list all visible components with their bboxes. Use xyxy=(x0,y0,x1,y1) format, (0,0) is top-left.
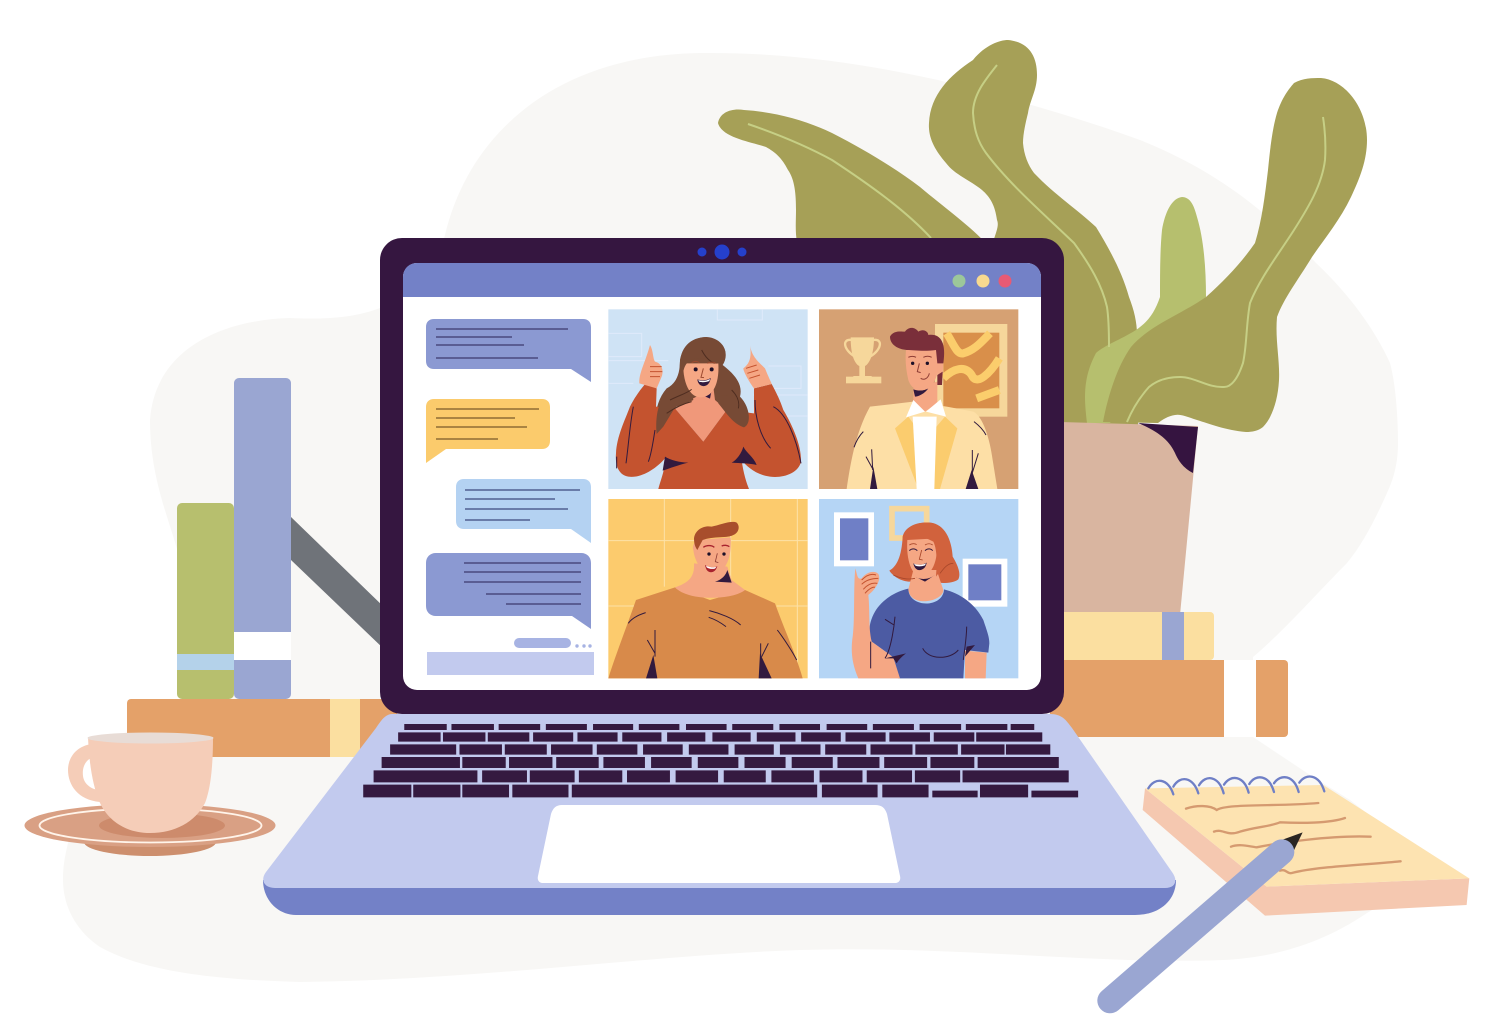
left hand xyxy=(639,345,663,388)
face xyxy=(683,363,718,397)
hair bangs xyxy=(680,337,726,372)
webcam xyxy=(698,244,746,260)
spiral binding xyxy=(1148,776,1324,794)
framed picture xyxy=(935,324,1007,417)
chat bubble 3 xyxy=(456,479,591,543)
sweater shadows xyxy=(663,447,757,471)
coffee cup and saucer xyxy=(24,732,276,856)
trackpad xyxy=(538,805,900,883)
saucer shadow xyxy=(99,813,225,838)
shirt xyxy=(869,589,989,678)
face xyxy=(907,538,937,577)
lapels xyxy=(895,417,957,489)
books: left stack xyxy=(127,378,397,757)
hair xyxy=(890,328,944,363)
book: leaning grey xyxy=(291,517,385,650)
face features xyxy=(911,362,914,365)
neck shadow xyxy=(699,390,712,399)
chat panel xyxy=(426,319,594,675)
window title bar xyxy=(403,263,1041,297)
right sleeve arm xyxy=(965,651,987,678)
screen xyxy=(403,263,1041,690)
handwriting lines xyxy=(1186,803,1401,873)
collar xyxy=(906,399,946,417)
book: blue xyxy=(234,378,291,699)
leaf veins xyxy=(748,65,1325,422)
typing pill xyxy=(514,638,571,648)
chat bubble 1 xyxy=(426,319,591,382)
hair back xyxy=(655,337,749,434)
message input xyxy=(427,652,594,675)
wall frame right xyxy=(963,559,1007,607)
wall frame yellow xyxy=(892,509,927,538)
bangs xyxy=(903,523,952,577)
laptop base deck xyxy=(263,714,1175,888)
trophy xyxy=(845,337,881,383)
hair xyxy=(694,522,739,550)
arm xyxy=(852,568,900,678)
saucer ring xyxy=(40,808,262,842)
pot dark rim xyxy=(1138,423,1198,473)
chat bubble 2 xyxy=(426,399,550,463)
leaf: right xyxy=(1103,78,1367,432)
tile: woman thumbs up xyxy=(608,309,808,489)
sweater xyxy=(616,383,801,489)
keyboard xyxy=(363,724,1078,797)
tile: man in orange sweater xyxy=(608,499,808,678)
books: right stack xyxy=(1050,612,1288,737)
book: yellow xyxy=(1050,612,1214,660)
cup body xyxy=(88,737,213,833)
sweater shadows xyxy=(646,653,772,678)
saucer xyxy=(24,804,276,847)
wall frame left xyxy=(834,512,874,566)
neck xyxy=(913,382,937,412)
hair front locks xyxy=(656,388,697,434)
hair back xyxy=(889,523,959,583)
notepad top xyxy=(1145,785,1469,887)
book: lying orange xyxy=(127,699,397,757)
head xyxy=(906,350,938,390)
cup handle xyxy=(68,744,100,802)
neck xyxy=(908,570,943,601)
pot xyxy=(1060,422,1198,615)
book: orange xyxy=(1050,660,1288,737)
right hand xyxy=(743,345,772,388)
neck and chest xyxy=(675,563,745,598)
head xyxy=(693,537,731,574)
screen bezel xyxy=(380,238,1064,714)
neck xyxy=(675,387,727,442)
plant xyxy=(718,40,1367,615)
cup rim xyxy=(88,732,214,744)
laptop xyxy=(263,238,1176,915)
jacket shadows xyxy=(870,467,978,489)
jacket xyxy=(847,402,997,489)
tile: man in yellow jacket xyxy=(819,309,1018,489)
video tiles xyxy=(608,309,1018,678)
saucer foot xyxy=(84,828,216,856)
eyes and mouth xyxy=(694,367,698,371)
shirt xyxy=(913,417,937,489)
book band: lying orange xyxy=(330,699,360,757)
shirt shadows xyxy=(885,645,975,663)
laptop base bottom edge xyxy=(263,880,1176,915)
notepad xyxy=(1110,776,1469,1001)
pen tip xyxy=(1282,832,1303,852)
pen body xyxy=(1110,852,1282,1001)
window buttons xyxy=(952,274,1012,288)
sweater xyxy=(608,587,803,678)
book: green xyxy=(177,503,234,699)
book band: green xyxy=(177,654,234,670)
notepad side xyxy=(1143,788,1469,916)
face features xyxy=(707,552,711,556)
tile: woman in blue shirt xyxy=(819,499,1018,678)
book band: yellow xyxy=(1162,612,1184,660)
leaf: center xyxy=(929,40,1138,425)
typing dots xyxy=(575,644,592,648)
book band: blue xyxy=(234,632,291,660)
leaf: left xyxy=(718,110,985,242)
leaf: small light xyxy=(1085,197,1206,423)
face features xyxy=(909,549,933,551)
chat bubble 4 xyxy=(426,553,591,629)
neck shadow xyxy=(715,570,732,583)
book band: orange xyxy=(1224,660,1256,737)
